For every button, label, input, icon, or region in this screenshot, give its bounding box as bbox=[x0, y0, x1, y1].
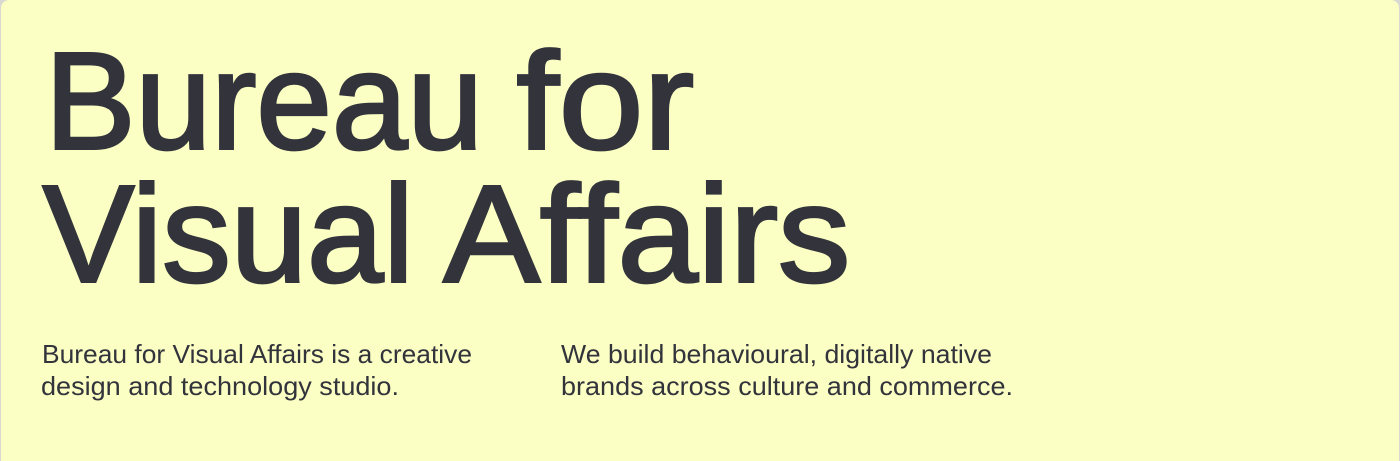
title line 1 bbox=[45, 24, 694, 178]
brands line 1: We build behavioural, digitally native bbox=[561, 339, 992, 369]
title line 1: Bureau bbox=[45, 24, 483, 178]
description line 2: design and technology studio. bbox=[41, 371, 399, 401]
title bbox=[43, 24, 850, 312]
description line 1: Bureau for Visual Affairs is a creative bbox=[42, 339, 472, 369]
text block: what the studio builds bbox=[561, 339, 1013, 401]
title line 2: Visual bbox=[43, 158, 414, 312]
title line 2: Affairs bbox=[444, 158, 850, 312]
brands line 2: brands across culture and commerce. bbox=[561, 371, 1013, 401]
title line 1: for bbox=[516, 24, 694, 178]
text block: studio description bbox=[41, 339, 472, 401]
title line 2 bbox=[43, 158, 850, 312]
